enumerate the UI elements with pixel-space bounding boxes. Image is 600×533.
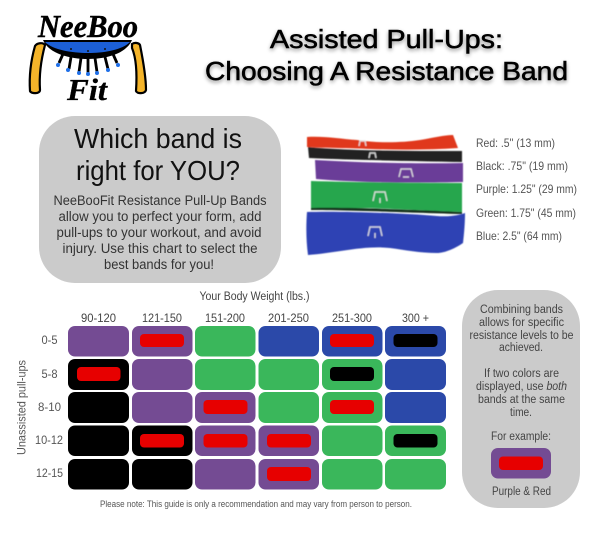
- weight column headers: 151-200: [205, 313, 245, 325]
- panel heading: right for YOU?: [76, 155, 240, 186]
- explanation text: displayed, use both: [476, 381, 567, 393]
- row 8-10: [68, 392, 446, 423]
- title: Assisted Pull-Ups:: [270, 26, 503, 56]
- weight column headers: 300 +: [402, 313, 429, 325]
- footnote: Please note: This guide is only a recommendation and may vary from person to person.: [100, 499, 412, 509]
- band: blue: [306, 212, 465, 255]
- band width labels: Purple: 1.25" (29 mm): [476, 182, 577, 196]
- band: green: [311, 181, 462, 212]
- example caption: Purple & Red: [492, 486, 551, 498]
- panel body text: NeeBooFit Resistance Pull-Up Bands: [54, 193, 267, 208]
- logo icon: right strap: [132, 43, 146, 93]
- title: [205, 24, 568, 88]
- title: Assisted Pull-Ups:: [270, 24, 503, 54]
- band logos: [359, 141, 413, 238]
- panel body text: [54, 193, 267, 272]
- explanation text: If two colors are: [484, 368, 559, 380]
- axis label: unassisted pull-ups: Unassisted pull-ups: [14, 360, 28, 455]
- weight column headers: 251-300: [332, 313, 372, 325]
- panel body text: allow you to perfect your form, add: [58, 209, 262, 224]
- panel body text: best bands for you!: [104, 257, 214, 272]
- explanation text: time.: [510, 407, 532, 419]
- band width labels: Blue: 2.5" (64 mm): [476, 229, 562, 243]
- pull-up row headers: 5-8: [42, 369, 58, 381]
- weight column headers: 90-120: [81, 313, 116, 325]
- logo wordmark: Fit: Fit: [66, 72, 108, 107]
- row 10-12: [68, 426, 446, 456]
- band width labels: [476, 136, 577, 243]
- weight column headers: 201-250: [268, 313, 309, 325]
- pull-up row headers: 12-15: [36, 468, 63, 480]
- panel: combining bands: [462, 290, 580, 508]
- band width labels: Green: 1.75" (45 mm): [476, 206, 576, 220]
- row 12-15: [68, 459, 446, 490]
- pull-up row headers: 8-10: [38, 402, 61, 414]
- photo: stack of resistance bands: [306, 135, 465, 255]
- weight column headers: [81, 313, 429, 325]
- title: Choosing A Resistance Band: [205, 58, 568, 88]
- band: purple: [315, 160, 463, 183]
- band recommendation grid: [68, 326, 446, 490]
- explanation text: resistance levels to be: [470, 330, 574, 342]
- panel heading: [74, 123, 242, 186]
- pull-up row headers: 10-12: [35, 435, 63, 447]
- pull-up row headers: [35, 335, 63, 480]
- panel body text: injury. Use this chart to select the: [62, 241, 258, 256]
- band width labels: Red: .5" (13 mm): [476, 136, 555, 150]
- panel body text: pull-ups to your workout, and avoid: [56, 225, 262, 240]
- panel: which band is right: [39, 116, 281, 283]
- row 0-5: [68, 326, 446, 356]
- row 5-8: [68, 359, 446, 390]
- logo: [30, 8, 146, 107]
- band: black: [308, 147, 462, 162]
- pull-up row headers: 0-5: [42, 335, 58, 347]
- band width labels: Black: .75" (19 mm): [476, 159, 568, 173]
- explanation text: bands at the same: [478, 394, 565, 406]
- logo icon: blue band bowl: [43, 40, 132, 59]
- band: red: [307, 135, 458, 150]
- chart heading: body weight: Your Body Weight (lbs.): [200, 291, 310, 303]
- band: green shadow line: [311, 208, 462, 214]
- title: Choosing A Resistance Band: [205, 56, 568, 86]
- panel heading: Which band is: [74, 123, 242, 154]
- logo wordmark: NeeBoo: NeeBoo: [37, 8, 138, 44]
- logo icon: dangling fringe: [56, 54, 120, 76]
- explanation text: allows for specific: [479, 317, 564, 329]
- explanation text: achieved.: [499, 342, 543, 354]
- logo icon: left strap: [30, 43, 45, 93]
- explanation text: Combining bands: [480, 304, 563, 316]
- explanation text: For example:: [491, 431, 551, 443]
- example swatch: purple and red: [491, 448, 551, 478]
- weight column headers: 121-150: [142, 313, 182, 325]
- explanation text: [470, 304, 574, 443]
